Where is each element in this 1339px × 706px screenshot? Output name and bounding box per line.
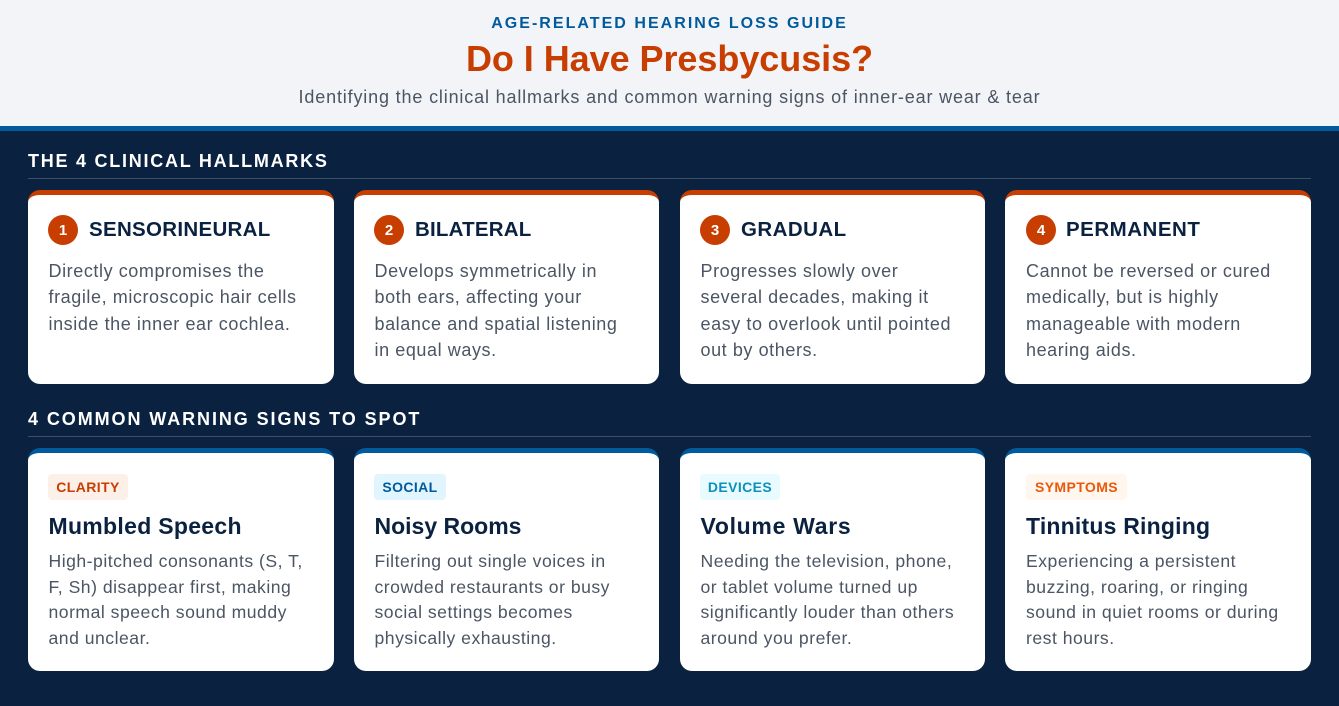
card text: easy to overlook until pointed	[700, 314, 951, 334]
card text: sound in quiet rooms or during	[1026, 602, 1279, 622]
card text	[48, 261, 297, 334]
card text	[1026, 261, 1271, 360]
card: mumbled speech	[28, 448, 334, 671]
eyebrow heading: AGE-RELATED HEARING LOSS GUIDE	[491, 15, 848, 32]
card text: rest hours.	[1026, 628, 1115, 648]
section heading: clinical hallmarks	[28, 151, 1311, 179]
card text: significantly louder than others	[700, 602, 954, 622]
card text: physically exhausting.	[374, 628, 557, 648]
section heading: warning signs: 4 COMMON WARNING SIGNS TO SPOT	[28, 409, 421, 429]
card text	[700, 261, 951, 360]
tag: social: SOCIAL	[382, 479, 438, 495]
card text: medically, but is highly	[1026, 287, 1219, 307]
number badge 1	[48, 215, 78, 245]
tag: symptoms: SYMPTOMS	[1035, 479, 1118, 495]
card text: Filtering out single voices in	[374, 551, 606, 571]
number badge 2	[374, 215, 404, 245]
section heading: clinical hallmarks: THE 4 CLINICAL HALLMARKS	[28, 151, 329, 171]
tag: symptoms	[1026, 474, 1127, 500]
card title: Tinnitus Ringing	[1026, 513, 1210, 539]
card title: Mumbled Speech	[48, 513, 242, 539]
card heading: GRADUAL	[741, 218, 847, 241]
card text: hearing aids.	[1026, 340, 1137, 360]
card text: Directly compromises the	[48, 261, 264, 281]
title: Do I Have Presbycusis?	[466, 38, 873, 79]
card text: normal speech sound muddy	[48, 602, 287, 622]
card: permanent	[1005, 190, 1311, 384]
card heading: BILATERAL	[415, 218, 531, 241]
card text	[48, 551, 303, 648]
card text: Cannot be reversed or cured	[1026, 261, 1271, 281]
card text: manageable with modern	[1026, 314, 1241, 334]
card text: in equal ways.	[374, 340, 497, 360]
card title: Noisy Rooms	[374, 513, 521, 539]
tag: devices: DEVICES	[708, 479, 772, 495]
number badge 3	[700, 215, 730, 245]
number badge 4: 4	[1037, 222, 1045, 239]
card text: several decades, making it	[700, 287, 929, 307]
card: tinnitus ringing	[1005, 448, 1311, 671]
card text: Needing the television, phone,	[700, 551, 952, 571]
card text	[374, 551, 610, 648]
card text: fragile, microscopic hair cells	[48, 287, 297, 307]
tag: devices	[700, 474, 780, 500]
card text: balance and spatial listening	[374, 314, 617, 334]
number badge 1: 1	[59, 222, 67, 239]
card text: crowded restaurants or busy	[374, 576, 610, 596]
card text: or tablet volume turned up	[700, 576, 918, 596]
card text: around you prefer.	[700, 628, 852, 648]
card text	[700, 551, 954, 648]
card text: and unclear.	[48, 628, 150, 648]
card text: Develops symmetrically in	[374, 261, 597, 281]
tag: clarity: CLARITY	[56, 479, 120, 495]
card text: High-pitched consonants (S, T,	[48, 551, 303, 571]
card: volume wars	[680, 448, 985, 671]
number badge 3: 3	[711, 222, 719, 239]
card text: inside the inner ear cochlea.	[48, 314, 290, 334]
card text	[1026, 551, 1279, 648]
section heading: warning signs	[28, 409, 1311, 437]
card heading: SENSORINEURAL	[89, 218, 271, 241]
card text: out by others.	[700, 340, 818, 360]
card text	[374, 261, 617, 360]
card heading: PERMANENT	[1066, 218, 1200, 241]
card text: both ears, affecting your	[374, 287, 582, 307]
card text: social settings becomes	[374, 602, 573, 622]
card text: Progresses slowly over	[700, 261, 898, 281]
tag: clarity	[48, 474, 128, 500]
card text: buzzing, roaring, or ringing	[1026, 576, 1248, 596]
tag: social	[374, 474, 446, 500]
card: bilateral	[354, 190, 659, 384]
card: gradual	[680, 190, 985, 384]
card text: Experiencing a persistent	[1026, 551, 1236, 571]
subtitle: Identifying the clinical hallmarks and common warning signs of inner-ear wear & tear	[299, 87, 1040, 107]
number badge 2: 2	[385, 222, 393, 239]
header band	[0, 0, 1339, 131]
card title: Volume Wars	[700, 513, 851, 539]
number badge 4	[1026, 215, 1056, 245]
card: sensorineural	[28, 190, 334, 384]
card: noisy rooms	[354, 448, 659, 671]
card text: F, Sh) disappear first, making	[48, 576, 291, 596]
